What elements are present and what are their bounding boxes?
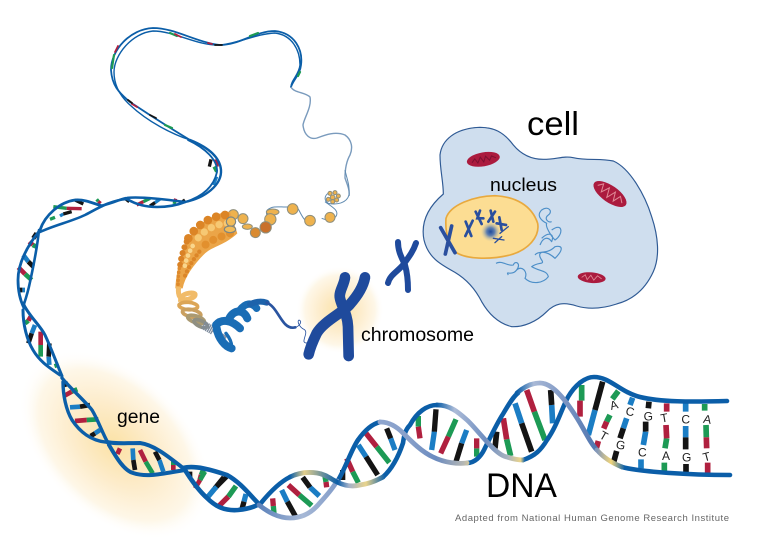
mitochondria — [466, 150, 631, 284]
endoplasmic reticulum — [496, 208, 561, 283]
glow: gene highlight — [0, 314, 247, 550]
base letters: T — [597, 428, 611, 444]
label: gene: gene — [117, 407, 160, 428]
cell membrane — [423, 127, 658, 327]
small chromosome — [388, 242, 416, 290]
label: cell: cell — [527, 105, 579, 142]
base letters: T — [701, 449, 713, 465]
base pairs: left lobes — [18, 233, 227, 498]
base letters: C — [638, 446, 647, 460]
nuclear chromosomes — [481, 222, 501, 242]
big chromosome — [309, 277, 365, 356]
cell — [423, 127, 658, 327]
credit line: Adapted from National Human Genome Research Institute — [455, 513, 729, 524]
base letters: A — [662, 449, 670, 463]
glow: chromosome highlight — [296, 266, 384, 354]
thin DNA thread — [267, 170, 349, 220]
base letters: C — [625, 404, 636, 419]
chromatin: orange-to-grey coil — [178, 287, 226, 338]
base pairs: top lobes — [50, 159, 217, 219]
base letters: G — [644, 410, 653, 424]
strand: fine pale section — [291, 87, 352, 196]
grey discs at fibre end — [224, 217, 236, 233]
strand: silver front sections — [259, 383, 622, 518]
label: nucleus: nucleus — [490, 175, 557, 195]
base letters: T — [659, 410, 670, 426]
strand: top thin loop — [111, 28, 301, 140]
base pairs: middle lobes — [200, 409, 477, 517]
base letters: C — [681, 412, 690, 426]
base letters: A — [608, 397, 620, 413]
base pairs: right ladder and letters — [495, 382, 713, 474]
base letters: G — [682, 450, 691, 464]
strand: left lobes — [18, 140, 221, 475]
base letters: G — [615, 437, 627, 453]
nucleus — [446, 196, 538, 258]
folded fibre — [175, 212, 237, 288]
base letters: A — [702, 412, 713, 427]
chromatin: beads on a string — [175, 170, 349, 288]
label: chromosome: chromosome — [361, 325, 474, 346]
base letters — [597, 397, 713, 465]
label: DNA: DNA — [486, 467, 557, 505]
strand: back and thick blue sections — [183, 377, 730, 510]
nucleosome beads — [228, 191, 340, 238]
chromatin: blue supercoil — [216, 302, 310, 348]
